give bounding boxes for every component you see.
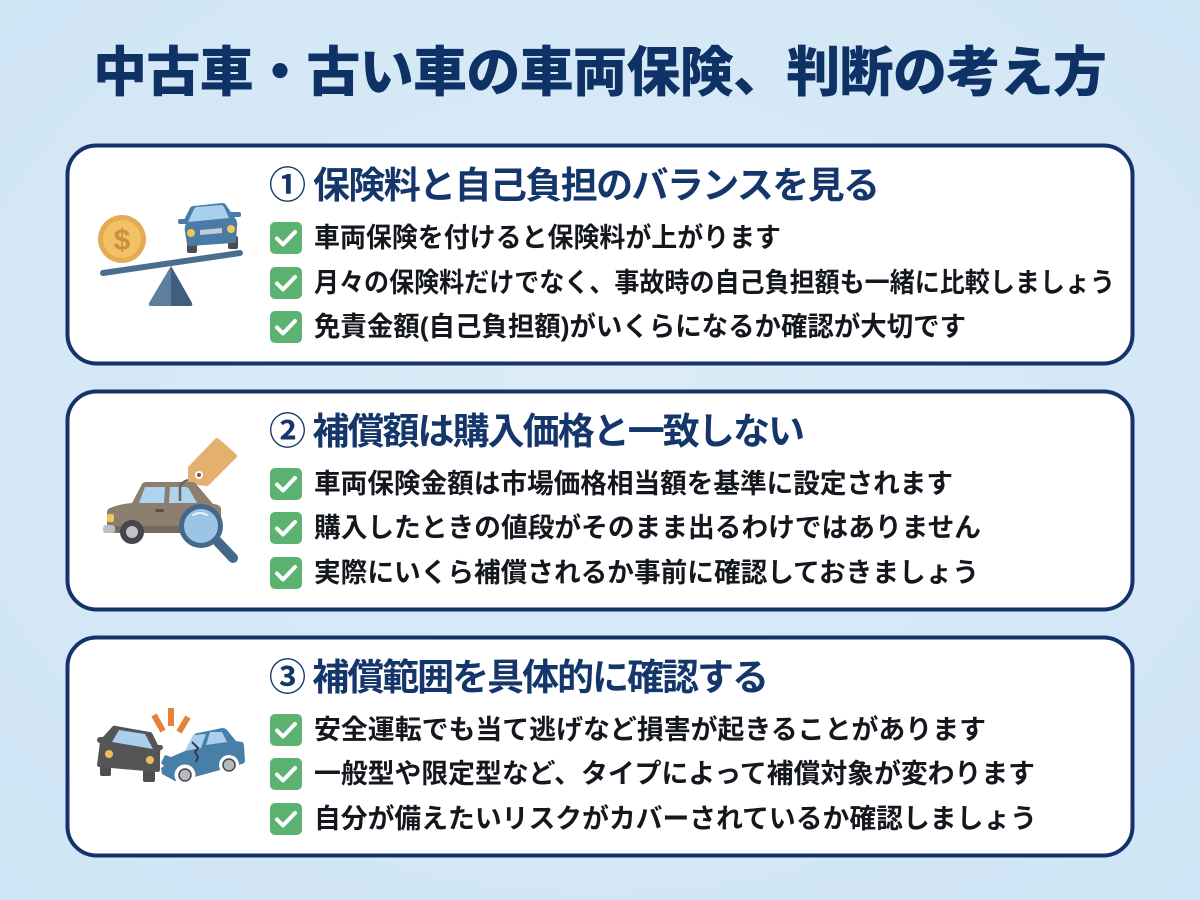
panel: balance of premium and deductible [68,146,1132,364]
checklist 3: 安全運転でも当て逃げなど損害が起きることがあります [314,714,986,745]
icon: collision of two cars [97,708,245,786]
checklist 1: 免責金額(自己負担額)がいくらになるか確認が大切です [314,311,966,342]
checklist 3: 一般型や限定型など、タイプによって補償対象が変わります [314,758,1035,789]
checklist 2: 実際にいくら補償されるか事前に確認しておきましょう [314,558,979,588]
checklist 2: 車両保険金額は市場価格相当額を基準に設定されます [314,469,953,499]
checklist 1: 月々の保険料だけでなく、事故時の自己負担額も一緒に比較しましょう [314,268,1115,298]
checklist 3: 自分が備えたいリスクがカバーされているか確認しましょう [314,803,1037,834]
icon: coin and car on a seesaw: $ [114,224,131,257]
checklist 2: 購入したときの値段がそのまま出るわけではありません [314,512,981,543]
title: 中古車・古い車の車両保険、判断の考え方 [93,43,1107,103]
panel: check coverage scope [68,638,1132,856]
icon: coin and car on a seesaw [98,203,241,306]
panel: compensation differs from purchase price [68,392,1132,610]
heading 3: ③ 補償範囲を具体的に確認する [269,657,769,698]
checklist 2 [270,468,981,589]
heading 1: ① 保険料と自己負担のバランスを見る [269,165,880,206]
heading 2: ② 補償額は購入価格と一致しない [269,411,805,452]
checklist 3 [270,714,1037,835]
checklist 1 [270,222,1115,343]
icon: car with price tag and magnifier [103,438,237,558]
checklist 1: 車両保険を付けると保険料が上がります [314,222,781,253]
